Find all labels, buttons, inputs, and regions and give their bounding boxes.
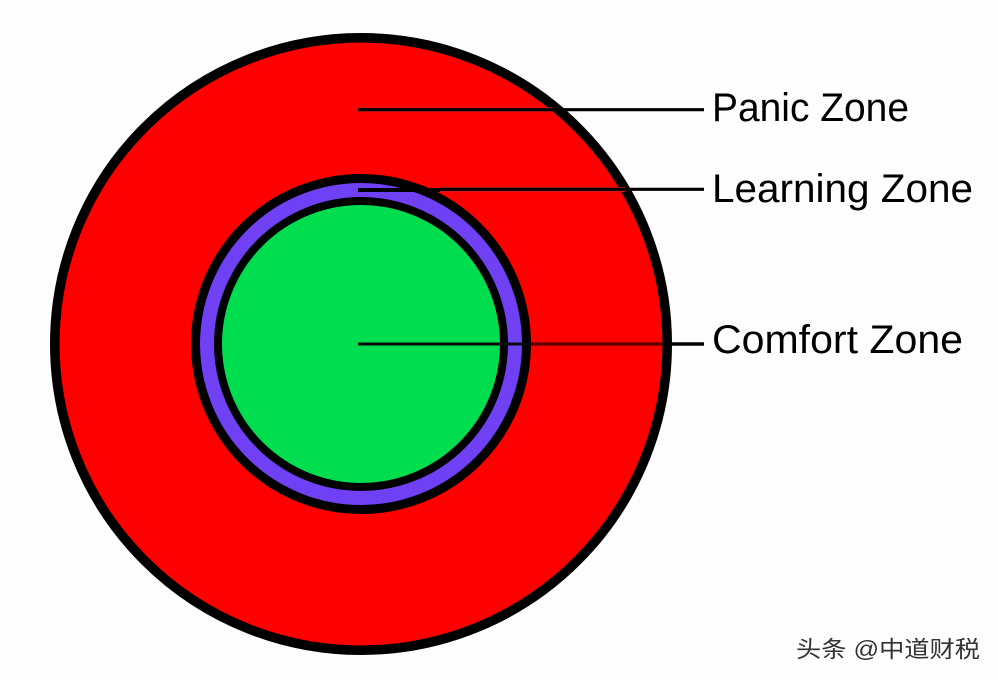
watermark: 头条 @中道财税 [796,636,980,662]
learning zone leader line [358,187,704,192]
comfort zone label: Comfort Zone [712,318,963,362]
comfort zone leader line [358,342,704,346]
panic zone leader line [358,107,704,112]
learning zone ring [196,178,526,510]
learning zone label: Learning Zone [712,167,973,211]
panic zone label: Panic Zone [712,86,909,130]
panic zone circle [55,38,667,650]
comfort zone circle [218,201,504,487]
